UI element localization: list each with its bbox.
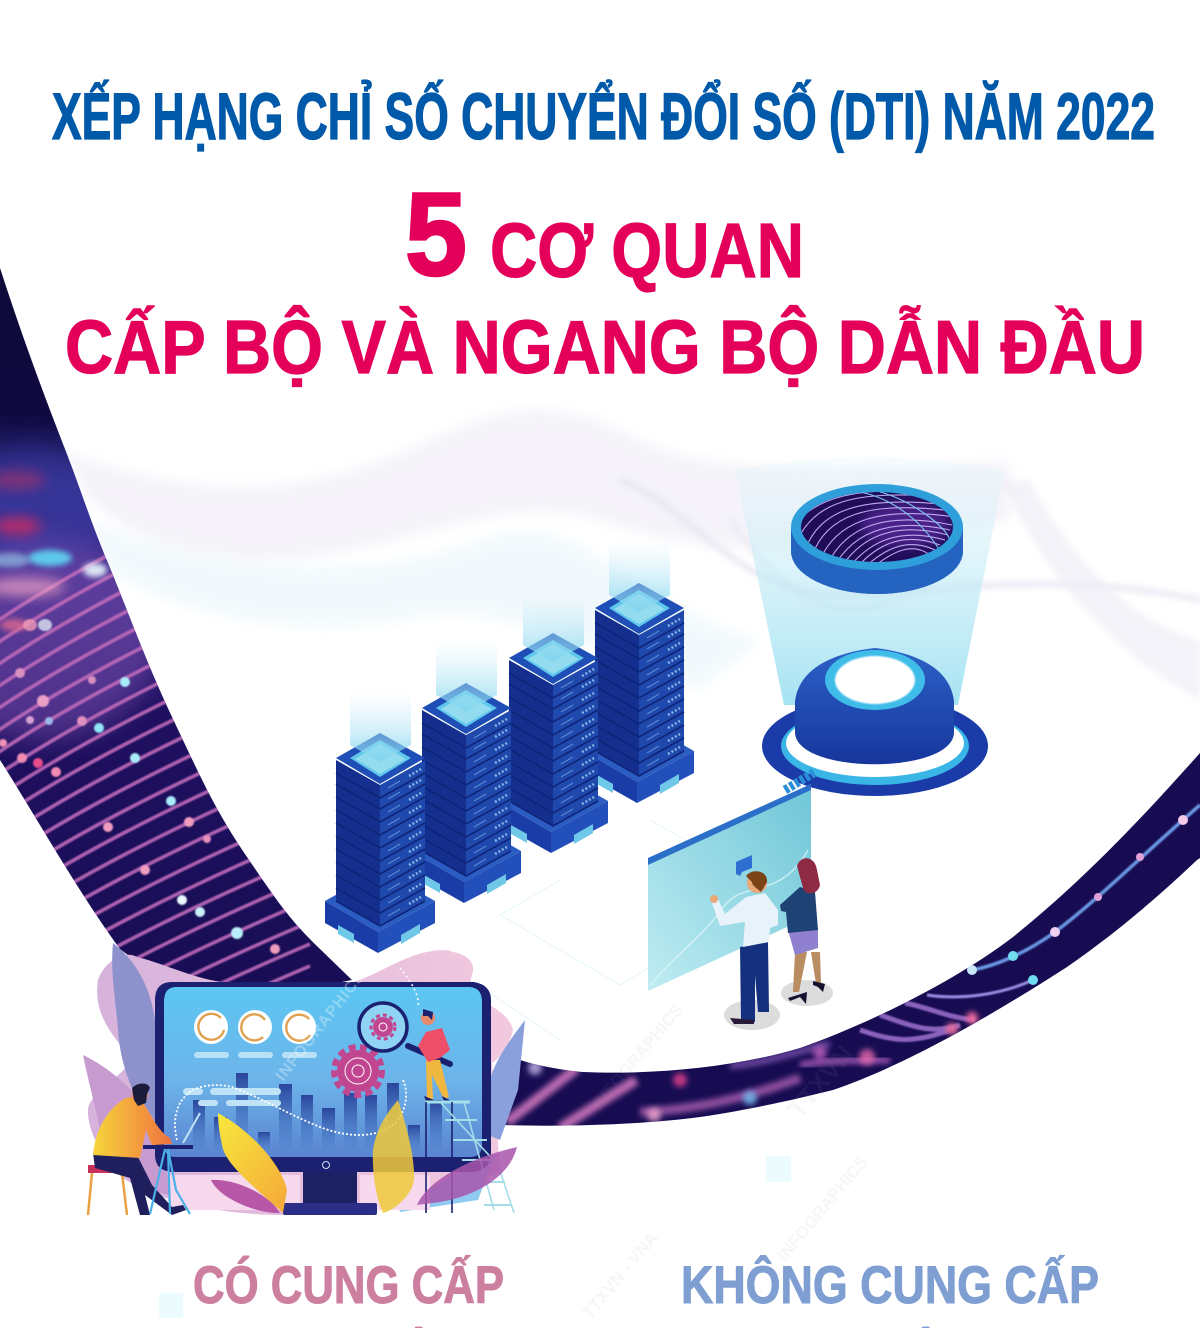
server tower 2 bbox=[411, 640, 521, 903]
gear bbox=[334, 1047, 382, 1095]
background blobs bbox=[83, 943, 525, 1215]
left decorative data band bbox=[0, 268, 352, 982]
small pale decorative squares bbox=[159, 1156, 791, 1318]
heading: 5 agencies: CƠ QUAN bbox=[490, 208, 804, 294]
base disk bbox=[762, 648, 988, 796]
person: man bbox=[710, 871, 780, 1030]
illustration: monitor with analysts bbox=[83, 943, 525, 1215]
column heading: not provided: KHÔNG CUNG CẤP bbox=[681, 1254, 1099, 1315]
chart labels bbox=[183, 1088, 281, 1106]
purple leaf bottom right bbox=[417, 1147, 517, 1205]
person: woman bbox=[780, 858, 833, 1006]
watermark light text: TTXVN bbox=[782, 1039, 859, 1124]
ladder bbox=[425, 1102, 514, 1213]
speech icon bbox=[736, 855, 752, 876]
dotted trend line bbox=[175, 1080, 406, 1140]
watermark light text: INFOGRAPHICS bbox=[774, 1153, 872, 1265]
heading: 5 agencies bbox=[405, 169, 804, 301]
magnifier with gear bbox=[359, 1003, 450, 1064]
analytics wall panel bbox=[648, 784, 811, 991]
yellow leaf left bbox=[218, 1113, 287, 1213]
bar chart bbox=[193, 1073, 442, 1150]
clipped next-line accents bbox=[398, 1325, 946, 1328]
server towers bbox=[325, 540, 694, 953]
server tower 3 bbox=[498, 590, 608, 853]
monitor bbox=[155, 982, 491, 1215]
server tower 4 bbox=[584, 540, 694, 803]
light beam bbox=[735, 458, 1005, 705]
heading: 5 agencies: 5 bbox=[405, 169, 467, 301]
watermark light text: TTXVN - VNA bbox=[579, 1229, 662, 1323]
seated man bbox=[88, 1084, 200, 1215]
purple leaf bottom left bbox=[211, 1180, 280, 1213]
watermark monitor: INFOGRAPHICS bbox=[273, 968, 369, 1084]
right decorative data band bbox=[490, 740, 1200, 1140]
person on ladder bbox=[418, 1009, 451, 1101]
decorative floor circuit lines bbox=[440, 820, 730, 1040]
holographic fingerprint device bbox=[735, 458, 1005, 796]
connector from panel to device bbox=[785, 772, 815, 790]
watermark light text: INFOGRAPHICS bbox=[589, 1001, 687, 1113]
column heading: provided: CÓ CUNG CẤP bbox=[193, 1255, 504, 1315]
watermark light text bbox=[579, 1001, 872, 1323]
server tower 1 bbox=[325, 690, 435, 953]
fingerprint coin bbox=[791, 484, 963, 594]
dashboard gauges bbox=[194, 1010, 317, 1058]
yellow translucent leaf bbox=[373, 1100, 414, 1213]
background wave ribbons bbox=[60, 410, 1200, 700]
